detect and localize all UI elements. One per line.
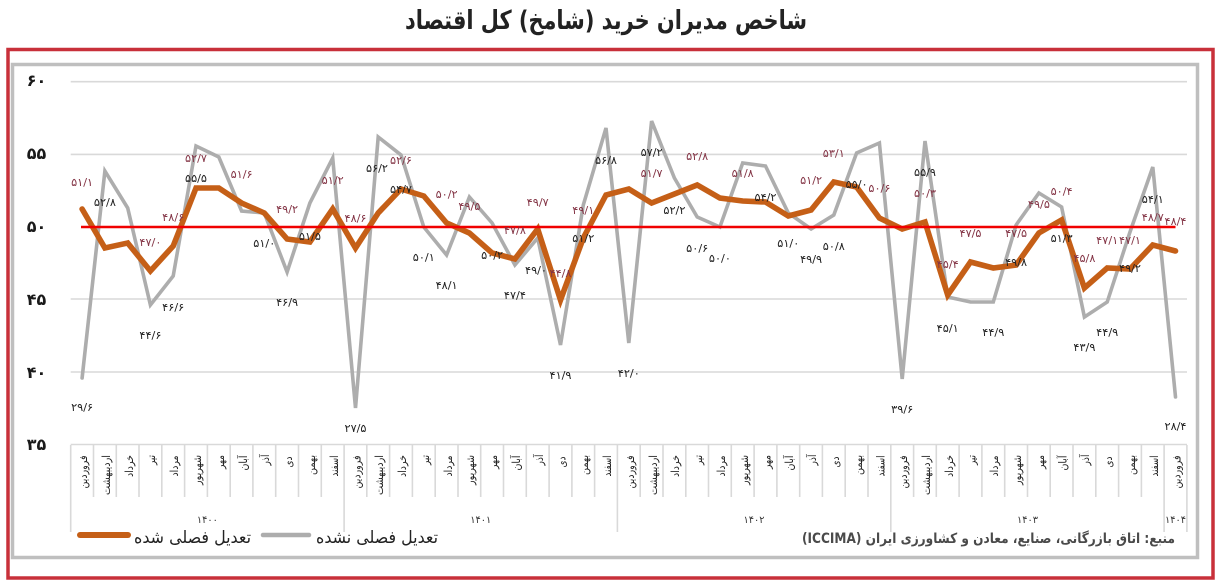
month labels: آبان	[782, 455, 796, 470]
data labels: seasonally adjusted: ۵۰/۳	[914, 187, 936, 200]
data labels: seasonally unadjusted: ۵۱/۲	[572, 232, 594, 245]
data labels: seasonally adjusted: ۵۱/۶	[231, 168, 253, 181]
year labels: ۱۴۰۰	[197, 515, 218, 526]
data labels: seasonally adjusted: ۴۹/۷	[527, 196, 549, 209]
data labels: seasonally adjusted: ۴۹/۲	[276, 203, 298, 216]
legend text: seasonally unadjusted: تعدیل فصلی نشده	[316, 528, 438, 548]
month labels: مهر	[760, 455, 774, 470]
month labels: خرداد	[123, 455, 136, 477]
title: شاخص مدیران خرید (شامخ) کل اقتصاد	[405, 6, 807, 36]
year labels: ۱۴۰۴	[1165, 515, 1186, 526]
line: seasonally unadjusted (gray)	[82, 121, 1176, 408]
data labels: seasonally unadjusted: ۵۵/۰	[846, 178, 868, 191]
month labels: آذر	[258, 454, 272, 466]
month labels: آذر	[805, 454, 819, 466]
month labels: فروردین	[1170, 456, 1184, 488]
data labels: seasonally unadjusted: ۵۰/۰	[709, 252, 731, 265]
month labels	[77, 454, 1184, 495]
month labels: اردیبهشت	[373, 455, 386, 495]
month labels: مرداد	[988, 455, 1001, 476]
month labels: تیر	[145, 455, 158, 466]
month labels: بهمن	[1125, 455, 1138, 475]
data labels: seasonally unadjusted: ۴۳/۹	[1073, 341, 1095, 354]
data labels: seasonally unadjusted: ۴۹/۲	[1119, 262, 1141, 275]
month labels: فروردین	[897, 456, 910, 488]
month labels: آبان	[236, 455, 250, 470]
data labels: seasonally unadjusted: ۵۶/۲	[366, 162, 388, 175]
month labels: اردیبهشت	[647, 455, 660, 495]
data labels: seasonally unadjusted: ۵۰/۸	[823, 240, 845, 253]
month labels: مهر	[487, 455, 500, 470]
month labels: دی	[1102, 456, 1115, 468]
threshold line at 50	[81, 226, 1176, 228]
month labels: آذر	[1078, 454, 1092, 466]
data labels: seasonally unadjusted: ۵۱/۵	[299, 230, 321, 243]
month labels: فروردین	[624, 456, 637, 488]
month labels: اسفند	[328, 456, 341, 476]
data labels: seasonally adjusted: ۴۸/۶	[344, 212, 366, 225]
data labels: seasonally adjusted: ۴۸/۶	[162, 211, 184, 224]
source note: منبع: اتاق بازرگانی، صنایع، معادن و کشاورزی ایران (ICCIMA)	[802, 530, 1175, 547]
data labels: seasonally adjusted: ۵۱/۲	[322, 174, 344, 187]
y axis labels: ۵۰	[27, 217, 46, 236]
data labels: seasonally unadjusted: ۵۰/۱	[413, 251, 435, 264]
month labels: تیر	[419, 455, 432, 466]
data labels: seasonally unadjusted: ۵۱/۰	[777, 237, 799, 250]
data labels: seasonally adjusted: ۴۷/۵	[1005, 227, 1027, 240]
y axis labels: ۳۵	[27, 435, 46, 454]
data labels: seasonally adjusted: ۵۰/۴	[1051, 185, 1073, 198]
data labels: seasonally unadjusted: ۵۵/۹	[914, 166, 936, 179]
data labels: seasonally adjusted: ۴۵/۸	[1073, 252, 1095, 265]
data labels: seasonally unadjusted: ۴۴/۹	[1096, 326, 1118, 339]
month labels: آذر	[532, 454, 546, 466]
data labels: seasonally unadjusted: ۴۹/۰	[525, 264, 547, 277]
data labels: seasonally adjusted: ۴۸/۴	[1164, 215, 1187, 228]
data labels: seasonally unadjusted: ۴۶/۹	[276, 296, 298, 309]
month labels: تیر	[692, 455, 705, 466]
month labels: اسفند	[874, 456, 888, 476]
data labels: seasonally adjusted: ۵۲/۶	[390, 154, 412, 167]
data labels: seasonally adjusted: ۵۰/۲	[436, 188, 458, 201]
y axis labels: ۶۰	[27, 71, 46, 90]
data labels: seasonally unadjusted: ۵۷/۲	[641, 146, 663, 159]
data labels: seasonally unadjusted: ۴۴/۶	[139, 329, 161, 342]
data labels: seasonally unadjusted: ۵۰/۶	[686, 242, 708, 255]
data labels: seasonally adjusted: ۵۲/۸	[686, 150, 708, 163]
data labels: seasonally adjusted: ۵۳/۱	[823, 147, 845, 160]
data labels: seasonally adjusted: ۵۱/۸	[732, 167, 754, 180]
data labels: seasonally unadjusted: ۵۶/۸	[595, 154, 617, 167]
data labels: seasonally adjusted: ۴۹/۵	[458, 200, 480, 213]
data labels: seasonally adjusted: ۴۷/۸	[504, 224, 526, 237]
data labels: seasonally unadjusted: ۲۹/۶	[71, 401, 93, 414]
data labels: seasonally adjusted: ۵۱/۱	[71, 176, 93, 189]
month labels: آبان	[1056, 455, 1070, 470]
data labels: seasonally adjusted	[71, 147, 1187, 280]
y axis labels: ۴۰	[27, 363, 46, 382]
month labels: بهمن	[578, 455, 591, 475]
year labels: ۱۴۰۳	[1017, 515, 1039, 526]
data labels: seasonally adjusted: ۴۷/۱	[1119, 234, 1141, 247]
month labels: اسفند	[601, 456, 614, 476]
data labels: seasonally adjusted: ۵۰/۶	[868, 182, 890, 195]
month labels: دی	[282, 456, 295, 468]
year labels	[197, 515, 1186, 526]
month labels: فروردین	[350, 456, 364, 488]
data labels: seasonally adjusted: ۴۹/۵	[1028, 198, 1050, 211]
month labels: شهریور	[738, 455, 751, 486]
y axis labels: ۴۵	[27, 290, 46, 309]
data labels: seasonally unadjusted: ۵۵/۵	[185, 172, 207, 185]
legend text: seasonally adjusted: تعدیل فصلی شده	[134, 528, 251, 548]
month labels: شهریور	[464, 455, 477, 486]
month labels: مرداد	[715, 455, 728, 476]
data labels: seasonally unadjusted: ۴۶/۶	[162, 301, 184, 314]
month labels: خرداد	[943, 455, 956, 477]
data labels: seasonally unadjusted: ۴۴/۹	[982, 326, 1004, 339]
year labels: ۱۴۰۱	[470, 515, 491, 526]
month labels: بهمن	[852, 455, 865, 475]
month labels: شهریور	[191, 455, 204, 486]
data labels: seasonally adjusted: ۴۹/۱	[572, 204, 594, 217]
data labels: seasonally unadjusted: ۵۴/۱	[1142, 193, 1164, 206]
legend	[80, 528, 438, 548]
data labels: seasonally unadjusted: ۵۲/۲	[663, 204, 685, 217]
data labels: seasonally adjusted: ۵۲/۷	[185, 152, 207, 165]
month labels: اردیبهشت	[100, 455, 113, 495]
data labels: seasonally unadjusted: ۵۰/۲	[481, 249, 503, 262]
data labels: seasonally unadjusted: ۴۷/۴	[504, 289, 526, 302]
data labels: seasonally adjusted: ۴۸/۷	[1142, 211, 1164, 224]
line: seasonally adjusted (orange)	[82, 182, 1176, 300]
data labels: seasonally unadjusted: ۳۹/۶	[891, 403, 913, 416]
month labels: مهر	[214, 455, 227, 470]
x axis category table	[71, 445, 1187, 532]
data labels: seasonally adjusted: ۴۴/۸	[550, 267, 572, 280]
data labels: seasonally unadjusted: ۵۲/۸	[94, 196, 116, 209]
month labels: مرداد	[442, 455, 455, 476]
month labels: دی	[829, 456, 842, 468]
data labels: seasonally adjusted: ۴۷/۰	[139, 236, 161, 249]
month labels: شهریور	[1011, 455, 1024, 486]
data labels: seasonally unadjusted: ۵۱/۳	[1051, 232, 1073, 245]
data labels: seasonally unadjusted: ۴۸/۱	[436, 279, 458, 292]
month labels: اسفند	[1148, 456, 1161, 476]
month labels: آبان	[509, 455, 523, 470]
data labels: seasonally unadjusted: ۲۷/۵	[344, 422, 367, 435]
data labels: seasonally adjusted: ۴۷/۵	[960, 227, 982, 240]
month labels: مرداد	[168, 455, 181, 476]
data labels: seasonally unadjusted: ۴۵/۱	[937, 322, 959, 335]
y axis labels	[27, 71, 46, 454]
legend key: seasonally unadjusted	[263, 533, 309, 537]
data labels: seasonally adjusted: ۴۵/۴	[937, 258, 959, 271]
data labels: seasonally unadjusted: ۴۱/۹	[550, 369, 572, 382]
month labels: دی	[556, 456, 568, 468]
data labels: seasonally unadjusted: ۵۴/۲	[754, 191, 777, 204]
data labels: seasonally unadjusted: ۵۴/۷	[390, 183, 412, 196]
month labels: فروردین	[77, 456, 90, 488]
year labels: ۱۴۰۲	[744, 515, 764, 526]
y axis labels: ۵۵	[27, 144, 46, 163]
data labels: seasonally unadjusted	[71, 146, 1187, 435]
legend key: seasonally adjusted	[80, 532, 128, 538]
month labels: مهر	[1034, 455, 1047, 470]
month labels: تیر	[966, 455, 978, 466]
data labels: seasonally unadjusted: ۲۸/۴	[1164, 420, 1187, 433]
month labels: اردیبهشت	[920, 455, 933, 495]
data labels: seasonally unadjusted: ۴۹/۸	[1005, 256, 1027, 269]
data labels: seasonally unadjusted: ۴۲/۰	[618, 367, 640, 380]
data labels: seasonally unadjusted: ۴۹/۹	[800, 253, 822, 266]
month labels: خرداد	[669, 455, 682, 477]
month labels: خرداد	[396, 455, 409, 477]
month labels: بهمن	[305, 455, 318, 475]
data labels: seasonally adjusted: ۵۱/۲	[800, 174, 822, 187]
data labels: seasonally unadjusted: ۵۱/۰	[253, 237, 275, 250]
data labels: seasonally adjusted: ۴۷/۱	[1096, 234, 1118, 247]
data labels: seasonally adjusted: ۵۱/۷	[641, 167, 663, 180]
